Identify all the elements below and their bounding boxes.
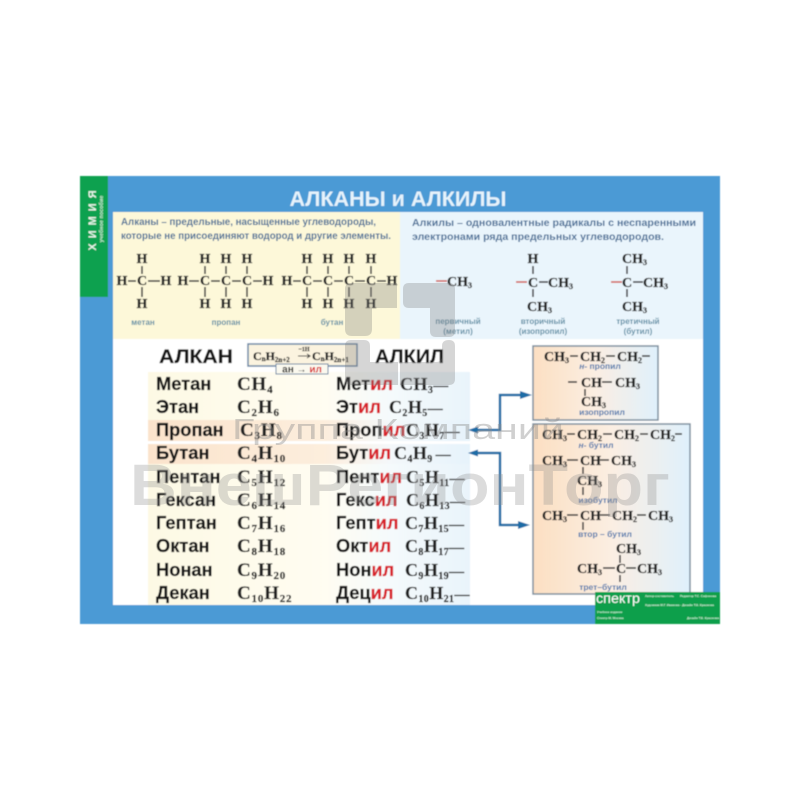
- secondary radical: C: [528, 276, 538, 291]
- methane structure: [117, 252, 172, 327]
- alkyl formulas: —: [448, 564, 465, 580]
- butane structure: C: [366, 274, 376, 289]
- alkane formulas: 6: [252, 500, 258, 512]
- panel: butyl isomers: 3: [598, 480, 602, 489]
- alkane formulas: [237, 374, 292, 605]
- alkyl formulas: H: [429, 583, 444, 603]
- panel: propyl isomers: CH: [544, 350, 565, 365]
- panel: butyl isomers: CH: [577, 562, 598, 577]
- panel: butyl isomers: 3: [563, 460, 567, 469]
- alkane names: Пропан: [156, 419, 224, 440]
- tertiary radical: CH: [622, 300, 643, 315]
- panel: butyl isomers: CH: [542, 454, 563, 469]
- panel: butyl isomers: CH: [616, 542, 637, 557]
- panel: alkanes: [113, 212, 400, 339]
- alkyl formulas: —: [449, 494, 466, 510]
- panel: butyl isomers: CH: [580, 509, 601, 524]
- alkyl formulas: C: [406, 467, 419, 487]
- panel: butyl isomers: 3: [637, 548, 641, 557]
- panel: butyl isomers: CH: [542, 509, 563, 524]
- methane structure: H: [137, 252, 148, 267]
- alkane names: Этан: [156, 396, 199, 417]
- propane structure: [178, 252, 274, 327]
- publisher block: Автор-составитель: [645, 594, 674, 598]
- panel: butyl isomers: 3: [669, 515, 673, 524]
- alkyl formulas: —: [448, 540, 465, 556]
- methane structure: метан: [131, 318, 155, 327]
- alkyl formulas: C: [405, 560, 418, 580]
- panel: propyl isomers: [533, 346, 658, 420]
- alkane formulas: 8: [252, 546, 258, 558]
- secondary radical: 3: [569, 282, 573, 291]
- conversion formula box: n: [262, 355, 266, 363]
- watermark: company caption: Группа Компаний: [232, 414, 564, 446]
- panel: butyl isomers: CH: [612, 509, 633, 524]
- panel: propyl isomers: 2: [601, 356, 605, 365]
- panel: propyl isomers: CH: [581, 395, 602, 410]
- table heading: alkane: АЛКАН: [159, 346, 233, 368]
- conversion formula box: C: [312, 349, 321, 363]
- panel: alkyls: [400, 212, 703, 339]
- arrow: butyl to butyl isomers: [468, 450, 530, 529]
- conversion formula box: 2n+2: [275, 356, 290, 364]
- alkyl formulas: 7: [439, 431, 445, 442]
- conversion formula box: [248, 344, 357, 376]
- panel: butyl isomers: CH: [577, 474, 598, 489]
- panel: propyl isomers: изопропил: [579, 407, 625, 417]
- alkyl formulas: H: [425, 467, 439, 487]
- alkyl formulas: 7: [418, 524, 424, 535]
- poster background: [80, 176, 720, 624]
- secondary radical: (изопропил): [519, 327, 568, 336]
- butane structure: H: [323, 297, 334, 312]
- panel: butyl isomers: C: [616, 562, 626, 577]
- subtitle label: учебное пособие: [98, 196, 105, 242]
- publisher block: Художник М.Г. Иванова · Дизайн Т.В. Краснова: [645, 603, 714, 607]
- alkyl formulas: CH: [400, 374, 428, 394]
- publisher block: Дизайн Т.В. Краснова: [687, 616, 719, 620]
- watermark: company name: ВнешРегионТорг: [130, 453, 670, 518]
- alkane formulas: C: [237, 583, 252, 604]
- watermark logo: [345, 283, 455, 385]
- alkyls definition: электронами ряда предельных углеводородов.: [412, 231, 664, 243]
- alkane formulas: H: [264, 583, 280, 604]
- panel: butyl isomers: изобутил: [578, 495, 618, 505]
- secondary radical: 3: [548, 306, 552, 315]
- tertiary radical: [611, 252, 668, 336]
- propane structure: H: [221, 297, 232, 312]
- alkane formulas: H: [258, 490, 273, 511]
- alkane formulas: C: [237, 513, 252, 534]
- alkane formulas: 4: [252, 453, 258, 465]
- butane structure: бутан: [321, 318, 343, 327]
- alkane formulas: C: [237, 467, 252, 488]
- alkane formulas: CH: [237, 374, 267, 395]
- panel: propyl isomers: 3: [602, 401, 606, 410]
- subject label: ХИМИЯ: [87, 185, 99, 251]
- panel: propyl isomers: CH: [581, 376, 602, 391]
- alkyl formulas: 21: [444, 594, 454, 605]
- alkyl formulas: H: [424, 536, 438, 556]
- tertiary radical: 3: [664, 282, 668, 291]
- alkyl formulas: —: [432, 378, 449, 394]
- conversion formula box: n: [321, 355, 325, 363]
- alkane formulas: H: [261, 420, 276, 441]
- alkane formulas: H: [258, 467, 273, 488]
- primary radical: CH: [447, 275, 468, 290]
- panel: butyl isomers: CH: [580, 454, 601, 469]
- table heading: alkyl: АЛКИЛ: [375, 346, 444, 368]
- alkyl names: Метил: [336, 373, 393, 394]
- propane structure: H: [242, 252, 253, 267]
- panel: butyl isomers: CH: [637, 562, 658, 577]
- publisher block: Редактор Т.С. Сафонова: [680, 594, 716, 598]
- alkyl names: Бутил: [336, 442, 391, 463]
- panel: butyl isomers: 2: [671, 434, 675, 443]
- alkyl names: Нонил: [336, 559, 394, 580]
- alkane formulas: H: [258, 513, 273, 534]
- conversion formula box: −1H: [298, 347, 310, 353]
- panel: butyl isomers: [533, 424, 690, 594]
- methane structure: C: [137, 274, 147, 289]
- alkane formulas: 2: [252, 407, 258, 419]
- alkyl formulas: H: [425, 490, 439, 510]
- butane structure: H: [344, 252, 355, 267]
- panel: butyl isomers: 2: [633, 515, 637, 524]
- alkyl formulas: 5: [419, 478, 425, 489]
- alkyl formulas: —: [444, 424, 461, 440]
- alkyl formulas: 11: [439, 478, 449, 489]
- panel: butyl isomers: 3: [598, 568, 602, 577]
- panel: propyl isomers: 3: [636, 382, 640, 391]
- propane structure: H: [242, 297, 253, 312]
- alkyl formulas: C: [389, 397, 402, 417]
- alkyl formulas: 2: [402, 408, 408, 419]
- alkane names: Гексан: [156, 489, 216, 510]
- alkyl formulas: C: [394, 443, 407, 463]
- butane structure: H: [282, 274, 293, 289]
- tertiary radical: CH: [643, 276, 664, 291]
- conversion formula box: ан → ил: [282, 364, 322, 376]
- alkane formulas: C: [237, 397, 252, 418]
- alkyl formulas: H: [425, 420, 439, 440]
- alkane formulas: 16: [273, 523, 286, 535]
- alkyl formulas: 17: [438, 547, 449, 558]
- alkyl formulas: 9: [418, 571, 424, 582]
- alkane formulas: 9: [252, 570, 258, 582]
- alkyl formulas: 19: [438, 571, 449, 582]
- alkyl formulas: 3: [428, 385, 433, 396]
- tertiary radical: CH: [622, 252, 643, 267]
- alkane formulas: 3: [255, 430, 261, 442]
- propane structure: H: [178, 274, 189, 289]
- panel: butyl isomers: н- бутил: [578, 440, 614, 450]
- panel: propyl isomers: CH: [580, 350, 601, 365]
- panel: butyl isomers: 2: [598, 434, 602, 443]
- alkane names: Метан: [156, 373, 211, 394]
- alkane names: [156, 373, 224, 603]
- alkane formulas: 5: [252, 477, 258, 489]
- alkyl formulas: [389, 374, 470, 605]
- title: АЛКАНЫ и АЛКИЛЫ: [290, 188, 506, 211]
- secondary radical: CH: [548, 276, 569, 291]
- panel: butyl isomers: 3: [632, 460, 636, 469]
- methane structure: H: [137, 297, 148, 312]
- alkane formulas: 10: [252, 593, 264, 605]
- conversion formula box: C: [253, 349, 262, 363]
- butane structure: H: [366, 252, 377, 267]
- propane structure: H: [200, 297, 211, 312]
- conversion formula box: 2n+1: [334, 356, 349, 364]
- alkane formulas: H: [258, 397, 273, 418]
- alkane formulas: 7: [252, 523, 258, 535]
- butane structure: H: [387, 274, 398, 289]
- panel: butyl isomers: CH: [542, 428, 563, 443]
- primary radical: первичный: [435, 317, 481, 326]
- alkane formulas: C: [237, 490, 252, 511]
- alkyl names: Пропил: [336, 419, 405, 440]
- alkane formulas: 18: [273, 546, 286, 558]
- alkyl names: Гексил: [336, 489, 398, 510]
- alkyls definition: Алкилы – одновалентные радикалы с неспаренными: [412, 217, 696, 229]
- alkane formulas: C: [237, 536, 252, 557]
- alkyl formulas: C: [406, 490, 419, 510]
- panel: propyl isomers: CH: [615, 376, 636, 391]
- propane structure: H: [221, 252, 232, 267]
- alkane formulas: H: [258, 560, 273, 581]
- panel: butyl isomers: 3: [658, 568, 662, 577]
- alkyl formulas: —: [448, 517, 465, 533]
- secondary radical: [516, 252, 573, 336]
- panel: butyl isomers: CH: [614, 428, 635, 443]
- panel: butyl isomers: CH: [577, 428, 598, 443]
- alkane names: Гептан: [156, 512, 217, 533]
- tertiary radical: 3: [643, 258, 647, 267]
- alkane formulas: H: [258, 536, 273, 557]
- alkane formulas: 14: [273, 500, 286, 512]
- conversion formula box: H: [266, 349, 276, 363]
- green side tab: [80, 176, 108, 297]
- alkyl formulas: C: [405, 583, 418, 603]
- butane structure: H: [344, 297, 355, 312]
- alkyl formulas: 4: [407, 454, 413, 465]
- butane structure: C: [344, 274, 354, 289]
- alkyl formulas: 15: [438, 524, 449, 535]
- table row backgrounds: [148, 372, 470, 605]
- alkane formulas: 8: [276, 430, 283, 442]
- publisher block: Учебное издание: [597, 610, 623, 614]
- butane structure: [282, 252, 398, 327]
- primary radical: [435, 275, 481, 336]
- conversion formula box: H: [325, 349, 335, 363]
- propane structure: H: [263, 274, 274, 289]
- alkyl formulas: —: [448, 471, 465, 487]
- propane structure: C: [221, 274, 231, 289]
- alkyl names: Гептил: [336, 512, 398, 533]
- primary radical: 3: [468, 281, 472, 290]
- butane structure: H: [302, 297, 313, 312]
- alkyl formulas: H: [413, 443, 427, 463]
- alkane names: Декан: [156, 582, 210, 603]
- alkane formulas: 4: [267, 384, 273, 396]
- alkane formulas: C: [240, 420, 255, 441]
- publisher block: Спектр-М, Москва: [597, 616, 624, 620]
- propane structure: C: [200, 274, 210, 289]
- alkane names: Нонан: [156, 559, 213, 580]
- alkyl formulas: 8: [418, 547, 424, 558]
- publisher block: [595, 590, 720, 624]
- methane structure: H: [161, 274, 172, 289]
- alkane formulas: 6: [273, 407, 280, 419]
- propane structure: H: [200, 252, 211, 267]
- alkyl names: Децил: [336, 582, 394, 603]
- alkane names: Пентан: [156, 466, 221, 487]
- propane structure: C: [242, 274, 252, 289]
- alkanes definition: Алканы – предельные, насыщенные углеводороды,: [121, 216, 376, 228]
- tertiary radical: 3: [643, 306, 647, 315]
- panel: propyl isomers: 2: [638, 356, 642, 365]
- alkane names: Октан: [156, 535, 210, 556]
- alkyl formulas: H: [424, 560, 438, 580]
- alkane formulas: H: [258, 443, 273, 464]
- alkane formulas: 10: [273, 453, 286, 465]
- alkyl formulas: C: [405, 513, 418, 533]
- panel: butyl isomers: 2: [635, 434, 639, 443]
- propane structure: пропан: [212, 318, 241, 327]
- alkyl formulas: 5: [422, 408, 428, 419]
- alkyl formulas: C: [406, 420, 419, 440]
- alkyl names: Этил: [336, 396, 381, 417]
- butane structure: H: [366, 297, 377, 312]
- butane structure: H: [302, 252, 313, 267]
- alkane formulas: 20: [273, 570, 286, 582]
- methane structure: H: [117, 274, 128, 289]
- alkyl formulas: —: [427, 401, 444, 417]
- alkyl formulas: 10: [418, 594, 429, 605]
- alkanes definition: которые не присоединяют водород и другие элементы.: [121, 230, 391, 242]
- alkyl formulas: 13: [439, 501, 450, 512]
- alkyl formulas: —: [435, 447, 452, 463]
- alkyl formulas: H: [424, 513, 438, 533]
- panel: butyl isomers: CH: [650, 428, 671, 443]
- alkane formulas: C: [237, 560, 252, 581]
- secondary radical: вторичный: [521, 317, 565, 326]
- alkane formulas: 22: [280, 593, 292, 605]
- alkyl names: [336, 373, 405, 603]
- alkyl formulas: H: [408, 397, 422, 417]
- panel: butyl isomers: CH: [648, 509, 669, 524]
- alkane formulas: C: [237, 443, 252, 464]
- alkyl names: Октил: [336, 535, 391, 556]
- tertiary radical: (бутил): [624, 327, 653, 336]
- alkyl formulas: 6: [419, 501, 425, 512]
- alkyl formulas: —: [453, 587, 470, 603]
- tertiary radical: третичный: [616, 317, 660, 326]
- panel: propyl isomers: н- пропил: [579, 361, 621, 371]
- alkane formulas: 12: [273, 477, 286, 489]
- panel: butyl isomers: трет–бутил: [579, 582, 627, 592]
- butane structure: C: [302, 274, 312, 289]
- butane structure: C: [323, 274, 333, 289]
- panel: butyl isomers: 3: [563, 434, 567, 443]
- butane structure: H: [323, 252, 334, 267]
- primary radical: (метил): [443, 327, 473, 336]
- panel: butyl isomers: CH: [611, 454, 632, 469]
- panel: propyl isomers: 3: [565, 356, 569, 365]
- panel: propyl isomers: CH: [617, 350, 638, 365]
- panel: butyl isomers: 3: [563, 515, 567, 524]
- alkyl formulas: C: [405, 536, 418, 556]
- panel: butyl isomers: втор – бутил: [578, 529, 632, 539]
- panel: white main area: [113, 338, 703, 605]
- tertiary radical: C: [622, 276, 632, 291]
- secondary radical: CH: [527, 300, 548, 315]
- alkane names: Бутан: [156, 442, 209, 463]
- alkyl formulas: 3: [419, 431, 425, 442]
- publisher block: спектр: [596, 590, 640, 606]
- arrow: propyl to propyl isomers: [468, 391, 532, 434]
- alkyl formulas: 9: [427, 454, 433, 465]
- alkyl names: Пентил: [336, 466, 402, 487]
- secondary radical: H: [528, 252, 539, 267]
